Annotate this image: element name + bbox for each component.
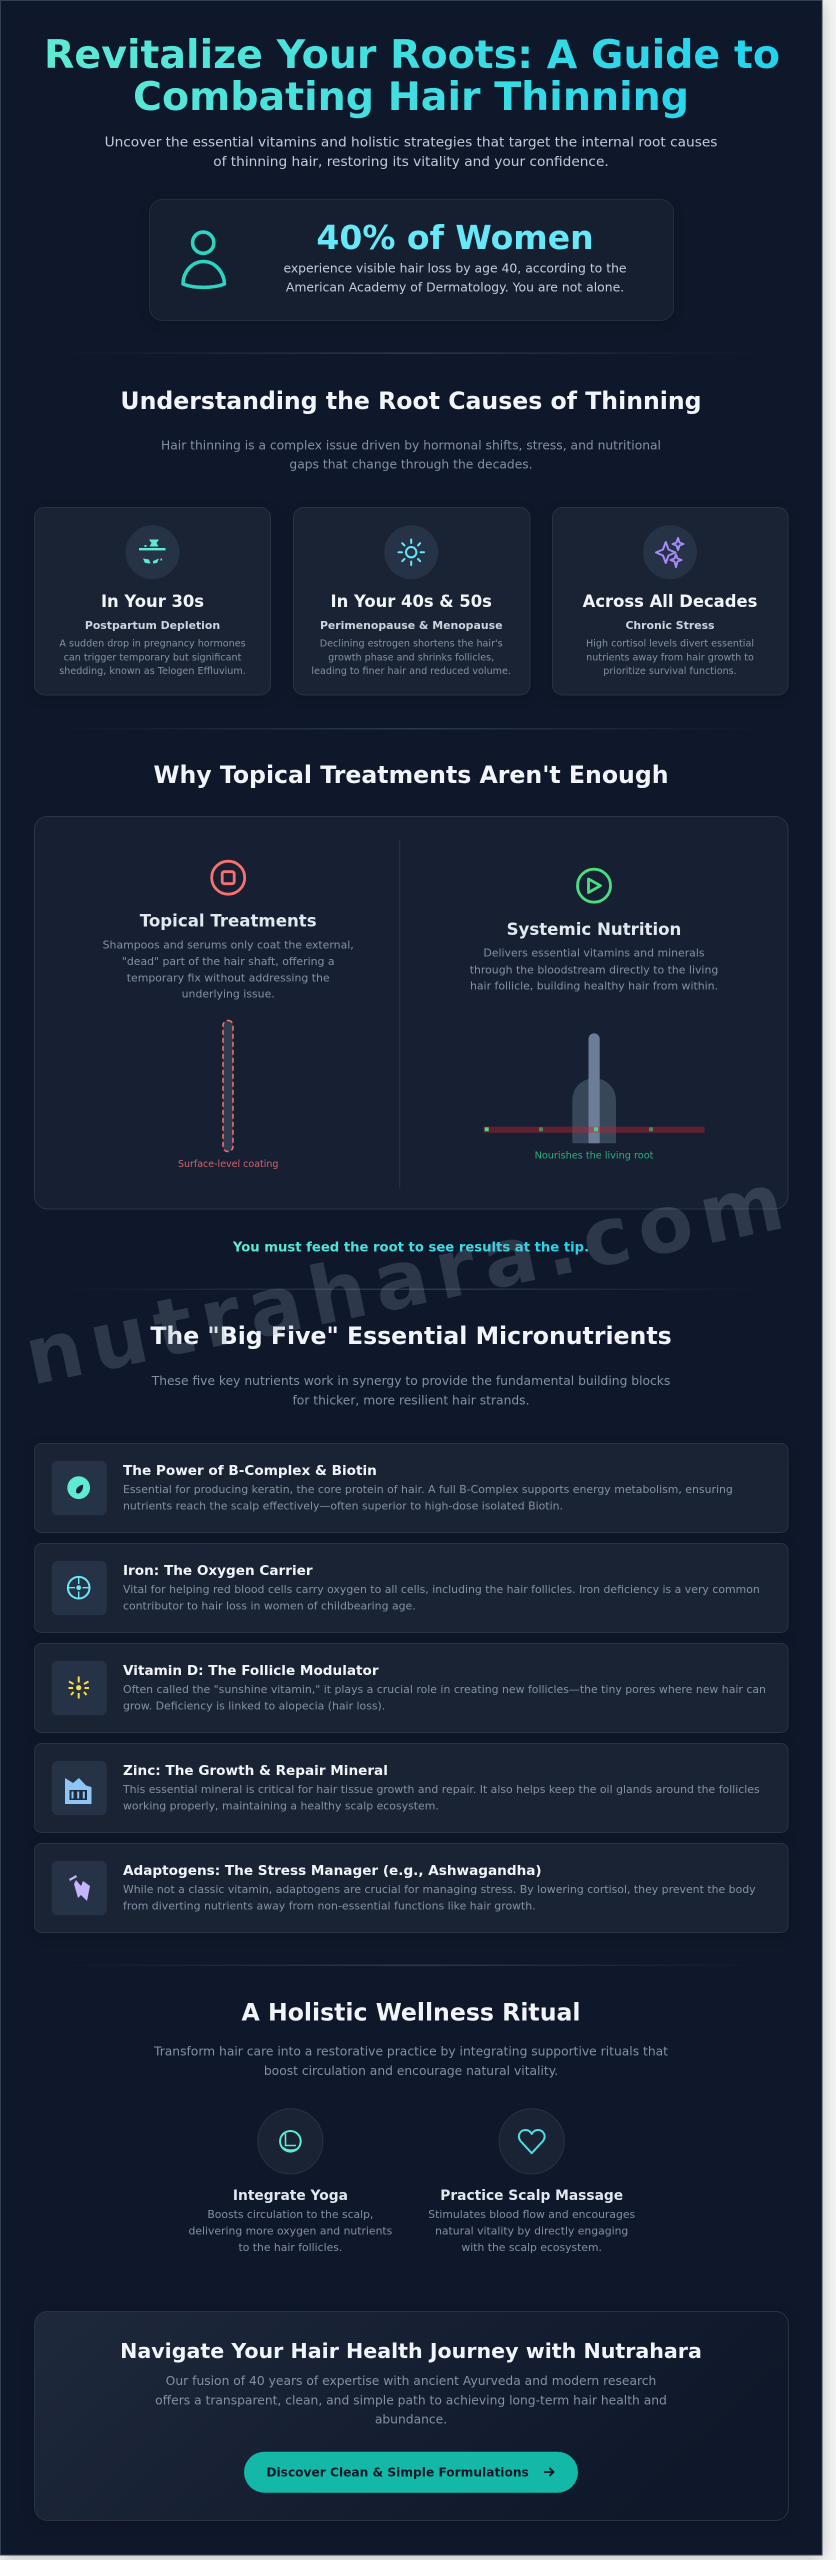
ritual text: Stimulates blood flow and encourages bbox=[428, 2208, 635, 2221]
icon: sun bbox=[398, 540, 424, 565]
watermark: nutrahara.com bbox=[17, 1153, 800, 1404]
card text: leading to finer hair and reduced volume. bbox=[311, 666, 511, 677]
panel: zinc bbox=[34, 1744, 788, 1832]
item text: While not a classic vitamin, adaptogens are crucial for managing stress. By lowering cortisol, they prevent the body bbox=[123, 1883, 756, 1896]
section intro: gaps that change through the decades. bbox=[289, 458, 533, 472]
ritual text: Boosts circulation to the scalp, bbox=[207, 2208, 373, 2221]
card subheading: Chronic Stress bbox=[625, 619, 715, 632]
cta button: Discover Clean & Simple Formulations bbox=[266, 2466, 529, 2480]
ritual heading: Integrate Yoga bbox=[233, 2188, 348, 2204]
card text: can trigger temporary but significant bbox=[64, 652, 242, 663]
item heading: Vitamin D: The Follicle Modulator bbox=[123, 1663, 379, 1679]
ritual text bbox=[428, 2208, 635, 2254]
divider bbox=[50, 728, 772, 729]
heading: Why Topical Treatments Aren't Enough bbox=[153, 761, 669, 789]
ritual text: to the hair follicles. bbox=[239, 2241, 342, 2254]
item text: Vital for helping red blood cells carry oxygen to all cells, including the hair follicles. Iron deficiency is a very common bbox=[123, 1583, 760, 1596]
ritual text: delivering more oxygen and nutrients bbox=[189, 2225, 393, 2238]
section intro bbox=[151, 1374, 670, 1407]
cta text: abundance. bbox=[375, 2412, 447, 2426]
heading: The "Big Five" Essential Micronutrients bbox=[150, 1322, 672, 1350]
item heading: Zinc: The Growth & Repair Mineral bbox=[123, 1763, 388, 1779]
panel: across all decades bbox=[552, 508, 788, 695]
card text bbox=[59, 639, 246, 677]
card text: prioritize survival functions. bbox=[603, 666, 737, 677]
section intro: These five key nutrients work in synergy to provide the fundamental building blocks bbox=[151, 1374, 670, 1388]
cta text: offers a transparent, clean, and simple path to achieving long-term hair health and bbox=[155, 2393, 667, 2407]
panel: iron bbox=[34, 1544, 788, 1632]
item text: grow. Deficiency is linked to alopecia (hair loss). bbox=[123, 1700, 385, 1713]
divider bbox=[50, 1965, 772, 1966]
card text bbox=[311, 639, 511, 677]
column heading: Topical Treatments bbox=[140, 912, 317, 931]
heading: Understanding the Root Causes of Thinning bbox=[120, 387, 702, 415]
icon: b-complex leaf bbox=[67, 1476, 90, 1499]
stat description: American Academy of Dermatology. You are not alone. bbox=[286, 280, 624, 294]
divider bbox=[50, 1289, 772, 1290]
icon: zinc building bbox=[65, 1778, 92, 1804]
card heading: Across All Decades bbox=[583, 592, 757, 611]
ritual: yoga bbox=[189, 2109, 393, 2254]
column heading: Systemic Nutrition bbox=[507, 920, 681, 939]
icon: sparkles bbox=[656, 538, 684, 567]
cta heading: Navigate Your Hair Health Journey with Nutrahara bbox=[120, 2339, 702, 2363]
icon: stop circle bbox=[212, 861, 245, 894]
cta text bbox=[155, 2374, 667, 2426]
card text: shedding, known as Telogen Effluvium. bbox=[59, 666, 246, 677]
icon: arrow bbox=[544, 2468, 554, 2476]
item heading: The Power of B-Complex & Biotin bbox=[123, 1463, 377, 1479]
subtitle: of thinning hair, restoring its vitality and your confidence. bbox=[213, 154, 609, 170]
column text: hair follicle, building healthy hair from within. bbox=[470, 980, 718, 993]
diagram: hair root bbox=[484, 1033, 704, 1143]
item text bbox=[122, 1783, 760, 1813]
section intro: for thicker, more resilient hair strands. bbox=[292, 1393, 530, 1407]
ritual text: natural vitality by directly engaging bbox=[435, 2225, 628, 2238]
item text: from diverting nutrients away from non-essential functions like hair growth. bbox=[123, 1900, 536, 1913]
card text: nutrients away from hair growth to bbox=[586, 652, 754, 663]
panel: adaptogens bbox=[34, 1844, 788, 1932]
cta button bbox=[244, 2452, 578, 2493]
icon: teal scissors bbox=[139, 540, 166, 564]
item text: nutrients reach the scalp effectively—often superior to high-dose isolated Biotin. bbox=[123, 1500, 563, 1513]
diagram: coated hair bbox=[223, 1020, 233, 1152]
ritual text bbox=[189, 2208, 393, 2254]
stat card: 40% of women bbox=[150, 200, 674, 320]
panel: vitamin d bbox=[34, 1644, 788, 1732]
section intro: boost circulation and encourage natural vitality. bbox=[264, 2064, 558, 2078]
column text bbox=[103, 939, 354, 1001]
panel: in your 30s bbox=[34, 508, 270, 695]
card text: growth phase and shrinks follicles, bbox=[328, 652, 494, 663]
stat description bbox=[283, 260, 627, 294]
column: topical treatments bbox=[103, 861, 354, 1170]
card heading: In Your 40s & 50s bbox=[330, 592, 492, 611]
icon: sun rays bbox=[68, 1676, 89, 1698]
subtitle bbox=[105, 135, 717, 170]
column text: through the bloodstream directly to the living bbox=[470, 963, 718, 976]
section: big five bbox=[34, 1322, 788, 1932]
ritual text: with the scalp ecosystem. bbox=[461, 2241, 602, 2254]
icon: stress bolt bbox=[69, 1875, 90, 1901]
caption: Surface-level coating bbox=[178, 1159, 278, 1170]
subtitle: Uncover the essential vitamins and holistic strategies that target the internal root causes bbox=[105, 135, 717, 151]
column text: "dead" part of the hair shaft, offering a bbox=[122, 955, 335, 968]
icon: person bbox=[183, 232, 224, 287]
column text: temporary fix without addressing the bbox=[127, 971, 330, 984]
item text bbox=[123, 1583, 760, 1613]
icon: yoga bbox=[280, 2131, 301, 2152]
card text: High cortisol levels divert essential bbox=[586, 639, 754, 650]
item text: Essential for producing keratin, the core protein of hair. A full B-Complex supports energy metabolism, ensuring bbox=[123, 1483, 733, 1496]
section intro bbox=[153, 2044, 668, 2078]
section intro: Hair thinning is a complex issue driven by hormonal shifts, stress, and nutritional bbox=[161, 438, 661, 452]
item text bbox=[123, 1483, 733, 1513]
section: topical treatments bbox=[34, 761, 788, 1256]
stat description: experience visible hair loss by age 40, according to the bbox=[283, 260, 627, 276]
card subheading: Postpartum Depletion bbox=[85, 619, 220, 632]
column: systemic nutrition bbox=[470, 869, 718, 1162]
item text: working properly, maintaining a healthy scalp ecosystem. bbox=[123, 1800, 439, 1813]
column text bbox=[470, 947, 718, 993]
card text: Declining estrogen shortens the hair's bbox=[320, 639, 503, 650]
header bbox=[44, 32, 780, 170]
section: holistic ritual bbox=[153, 1999, 668, 2254]
ritual: scalp massage bbox=[428, 2109, 635, 2254]
item text: contributor to hair loss in women of childbearing age. bbox=[123, 1600, 416, 1613]
icon: heart bbox=[519, 2130, 545, 2153]
card text bbox=[586, 639, 754, 677]
column text: Delivers essential vitamins and minerals bbox=[483, 947, 705, 960]
panel: comparison bbox=[34, 816, 788, 1209]
item text bbox=[123, 1883, 756, 1913]
item text: This essential mineral is critical for hair tissue growth and repair. It also helps keep the oil glands around the follicles bbox=[122, 1783, 760, 1796]
cta text: Our fusion of 40 years of expertise with ancient Ayurveda and modern research bbox=[166, 2374, 656, 2388]
title: Combating Hair Thinning bbox=[133, 74, 689, 120]
title bbox=[44, 32, 780, 120]
section intro: Transform hair care into a restorative practice by integrating supportive rituals that bbox=[153, 2044, 668, 2058]
icon: iron target bbox=[68, 1577, 90, 1598]
column text: underlying issue. bbox=[182, 988, 275, 1001]
panel: call to action bbox=[34, 2312, 788, 2520]
card heading: In Your 30s bbox=[101, 592, 204, 611]
item heading: Adaptogens: The Stress Manager (e.g., Ashwagandha) bbox=[123, 1863, 542, 1879]
item text: Often called the "sunshine vitamin," it plays a crucial role in creating new follicles—the tiny pores where new hair can bbox=[123, 1683, 766, 1696]
caption: Nourishes the living root bbox=[535, 1151, 654, 1162]
section intro bbox=[161, 438, 661, 472]
item text bbox=[123, 1683, 766, 1713]
column text: Shampoos and serums only coat the external, bbox=[103, 939, 354, 952]
ritual heading: Practice Scalp Massage bbox=[440, 2188, 623, 2204]
item heading: Iron: The Oxygen Carrier bbox=[123, 1563, 313, 1579]
icon: play circle bbox=[578, 869, 610, 902]
section: root causes bbox=[34, 387, 788, 695]
card subheading: Perimenopause & Menopause bbox=[320, 619, 502, 632]
heading: A Holistic Wellness Ritual bbox=[241, 1999, 581, 2027]
panel: in your 40s and 50s bbox=[294, 508, 530, 695]
card text: A sudden drop in pregnancy hormones bbox=[59, 639, 246, 650]
divider bbox=[50, 352, 772, 354]
key takeaway: You must feed the root to see results at the tip. bbox=[232, 1241, 589, 1256]
panel: b-complex bbox=[34, 1444, 788, 1532]
stat number: 40% of Women bbox=[316, 218, 594, 257]
title: Revitalize Your Roots: A Guide to bbox=[44, 32, 780, 78]
